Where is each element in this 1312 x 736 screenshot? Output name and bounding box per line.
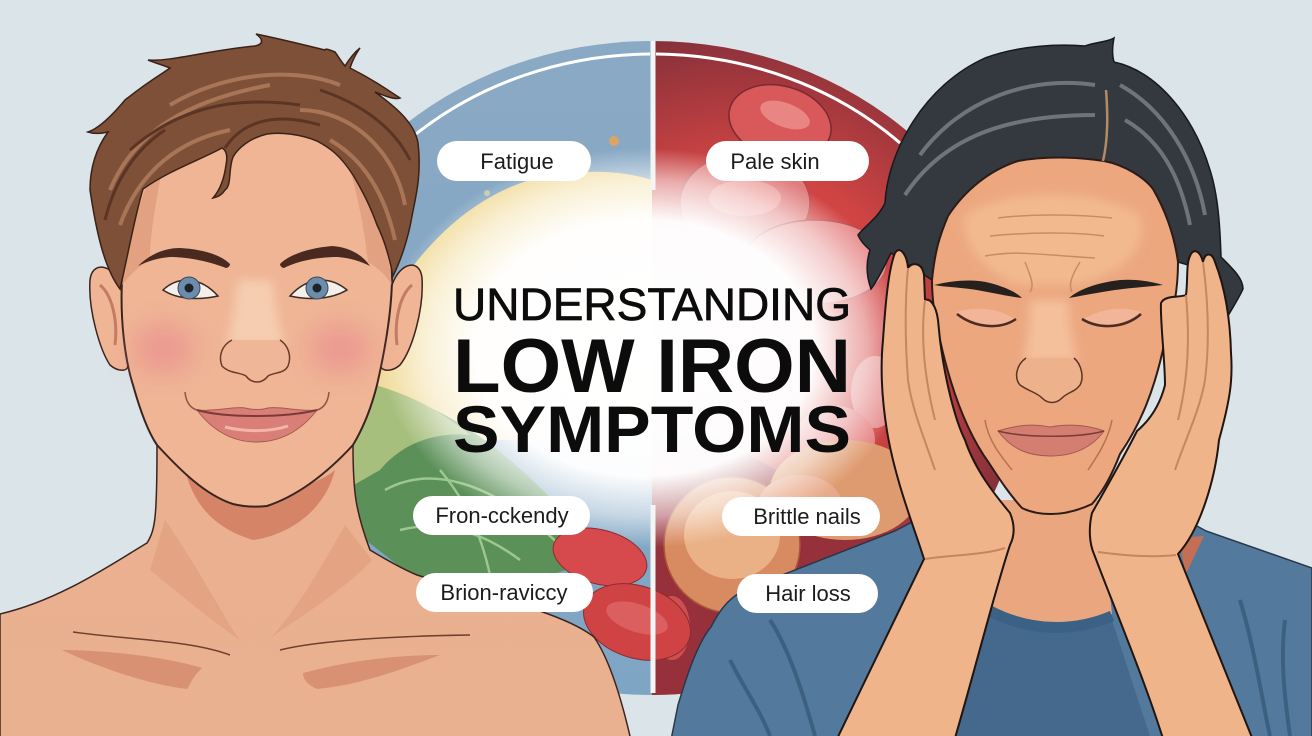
- hair strands: [905, 83, 1205, 225]
- blue shirt: [670, 520, 1312, 736]
- symptom pill: Pale skin: [706, 141, 869, 181]
- red blood cells, lower left: [547, 518, 700, 673]
- eyebrows: [138, 246, 370, 268]
- white glow: [380, 148, 910, 548]
- symptom pill: Fatigue: [437, 141, 591, 181]
- left hand and arm: [834, 250, 1014, 736]
- mouth: [185, 392, 329, 442]
- neck back: [1178, 536, 1204, 574]
- food: cream vegetable: [370, 172, 652, 440]
- title: UNDERSTANDING: [453, 279, 851, 330]
- white inner ring: [416, 54, 900, 143]
- nose: [1017, 300, 1082, 402]
- symptom pill: Fatigue: Fatigue: [480, 149, 554, 174]
- central split circle: [354, 41, 1000, 695]
- food: green cabbage leaf: [354, 386, 566, 576]
- hair parting: [1103, 90, 1107, 161]
- right half: red with cells: [652, 40, 1024, 700]
- red blood cells, upper right: [680, 84, 888, 450]
- eyes: [163, 277, 347, 299]
- forehead and temple shading: [122, 150, 392, 285]
- symptom pill: Brittle nails: [722, 497, 880, 536]
- symptom pill: Fron-cckendy: Fron-cckendy: [435, 503, 569, 528]
- shirt folds: [730, 600, 1290, 736]
- neck: [990, 500, 1112, 625]
- symptom pill: Brion-raviccy: [416, 573, 593, 612]
- collarbone shading: [62, 632, 470, 689]
- title: SYMPTOMS: [453, 392, 851, 466]
- hair strands: [110, 75, 405, 240]
- cheeks: [133, 325, 193, 373]
- shoulders and neck: [0, 445, 632, 736]
- eyebrows: [934, 280, 1163, 298]
- symptom pill: Brittle nails: Brittle nails: [753, 504, 861, 529]
- hair dark strands: [105, 90, 410, 220]
- right person: symptomatic: [670, 38, 1312, 736]
- forehead wrinkles: [985, 215, 1112, 292]
- right hand and arm: [1090, 251, 1255, 736]
- shirt collar: [990, 611, 1112, 627]
- symptom pill: Hair loss: [737, 574, 878, 613]
- eyelids: [957, 309, 1141, 326]
- hair: [88, 34, 419, 289]
- forehead highlight: [964, 194, 1142, 285]
- ears: [90, 265, 422, 370]
- left person: healthy: [0, 34, 632, 736]
- center divider: [650, 41, 656, 693]
- symptom pill: Fron-cckendy: [413, 496, 590, 535]
- symptom pill: Hair loss: Hair loss: [765, 581, 851, 606]
- symptom pill: Pale skin: Pale skin: [730, 149, 820, 174]
- finger and wrist creases: [906, 262, 1208, 559]
- face: [122, 110, 392, 507]
- nose: [220, 280, 290, 382]
- shirt inner chest: [950, 609, 1150, 736]
- title: [453, 279, 851, 466]
- iron rich food, lower right: [654, 440, 920, 660]
- symptom pill: Brion-raviccy: Brion-raviccy: [440, 580, 568, 605]
- left half: blue with food: [354, 41, 652, 695]
- title: LOW IRON: [453, 324, 851, 409]
- hair: [858, 38, 1243, 321]
- mouth: [985, 420, 1112, 470]
- face: [932, 158, 1178, 514]
- neck shading: [150, 470, 372, 640]
